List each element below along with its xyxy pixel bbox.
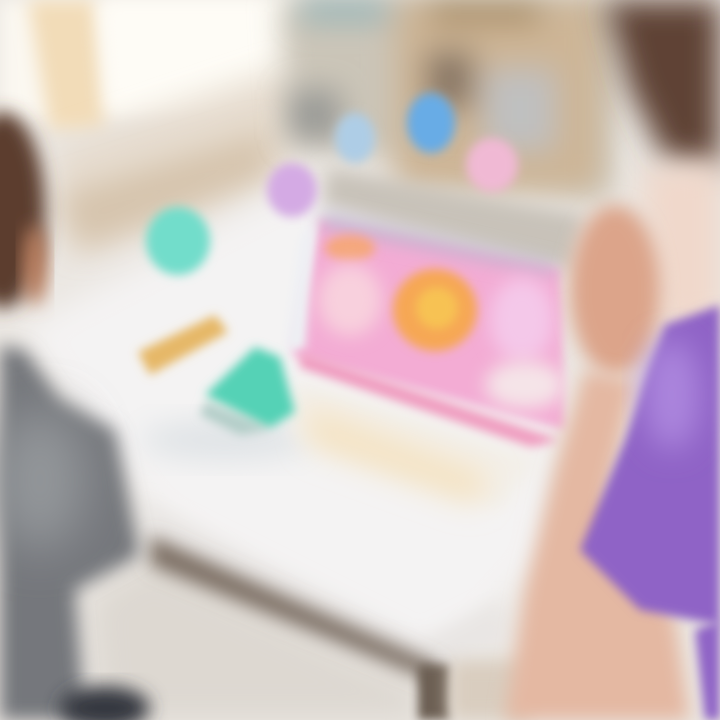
child on left xyxy=(0,112,150,720)
shelves: top right background xyxy=(290,0,600,190)
right child hair xyxy=(605,0,720,170)
right child face and hand xyxy=(640,160,720,340)
right child arm xyxy=(505,370,690,720)
icon: teal triangle xyxy=(200,347,295,435)
left child hair xyxy=(0,112,45,308)
laptop keyboard xyxy=(290,380,540,510)
icon: yellow pill xyxy=(138,315,228,375)
left child shirt xyxy=(0,345,140,720)
laptop lid top xyxy=(322,168,585,270)
child on right xyxy=(505,0,720,720)
icon: blue circle xyxy=(407,93,455,153)
icon: pink circle xyxy=(466,138,518,192)
floor and desk legs xyxy=(90,535,530,720)
icon: purple circle xyxy=(267,163,317,217)
icon: light blue circle xyxy=(335,113,375,163)
laptop screen xyxy=(292,218,565,430)
right child purple shirt xyxy=(580,305,720,625)
laptop xyxy=(285,168,585,510)
desk: white tabletop xyxy=(20,190,560,680)
icon: teal circle xyxy=(146,207,210,275)
